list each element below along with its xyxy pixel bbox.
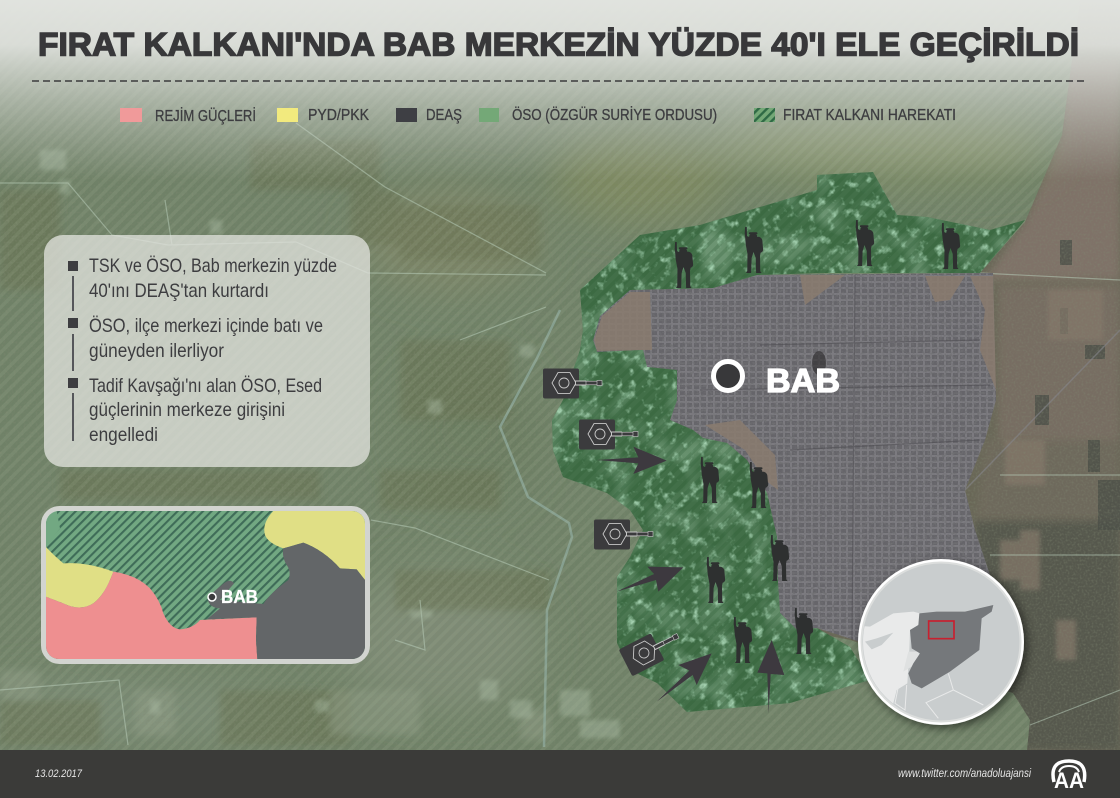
- point 3: Tadif Kavşağı'nı alan ÖSO, Esed: [89, 375, 322, 397]
- red locator box: [929, 621, 954, 639]
- roads: [0, 123, 1120, 745]
- tanks: [543, 368, 685, 676]
- inset map: [44, 508, 368, 662]
- brown eastern farmland: [975, 60, 1120, 750]
- point 3: engelledi: [89, 424, 158, 446]
- legend: rejim güçleri: REJİM GÜÇLERİ: [155, 106, 256, 125]
- legend: pyd/pkk: [277, 107, 369, 124]
- city marker: Bab: [714, 362, 840, 399]
- point 2: güneyden ilerliyor: [89, 340, 224, 362]
- inset city marker: [208, 593, 216, 601]
- legend: öso: ÖSO (ÖZGÜR SURİYE ORDUSU): [512, 105, 717, 124]
- legend: deaş: [396, 107, 462, 124]
- footer: [0, 750, 1120, 798]
- legend: pyd/pkk: PYD/PKK: [308, 107, 369, 124]
- legend: [120, 105, 956, 125]
- twitter url: www.twitter.com/anadoluajansi: [898, 768, 1031, 780]
- legend: rejim güçleri: [120, 106, 256, 125]
- legend: fırat kalkanı harekatı: FIRAT KALKANI HAREKATI: [783, 107, 956, 124]
- settlements: [40, 150, 620, 738]
- city of Bab: [593, 273, 996, 645]
- logo: Anadolu Ajansı: AA: [1054, 768, 1084, 793]
- olive field patches: [0, 140, 550, 745]
- panel: key points: [44, 235, 370, 467]
- title: FIRAT KALKANI'NDA BAB MERKEZİN YÜZDE 40'I ELE GEÇİRİLDİ: [38, 26, 1079, 62]
- point 3: güçlerinin merkeze girişini: [89, 399, 285, 421]
- point 2: [68, 315, 323, 371]
- point 1: TSK ve ÖSO, Bab merkezin yüzde: [89, 255, 337, 277]
- dark green controlled zone: [552, 172, 1025, 712]
- point 1: 40'ını DEAŞ'tan kurtardı: [89, 280, 269, 302]
- date: 13.02.2017: [35, 768, 83, 780]
- inset city label: BAB: [221, 587, 258, 607]
- point 1: [68, 255, 337, 311]
- legend: deaş: DEAŞ: [426, 107, 462, 124]
- city label: BAB: [766, 362, 840, 399]
- advance arrows: [597, 447, 784, 713]
- top fade: [0, 0, 1120, 180]
- legend: öso: [479, 105, 717, 124]
- soldiers: [675, 220, 960, 663]
- point 2: ÖSO, ilçe merkezi içinde batı ve: [89, 315, 323, 337]
- locator map lens: [850, 559, 1024, 727]
- point 3: [68, 375, 322, 446]
